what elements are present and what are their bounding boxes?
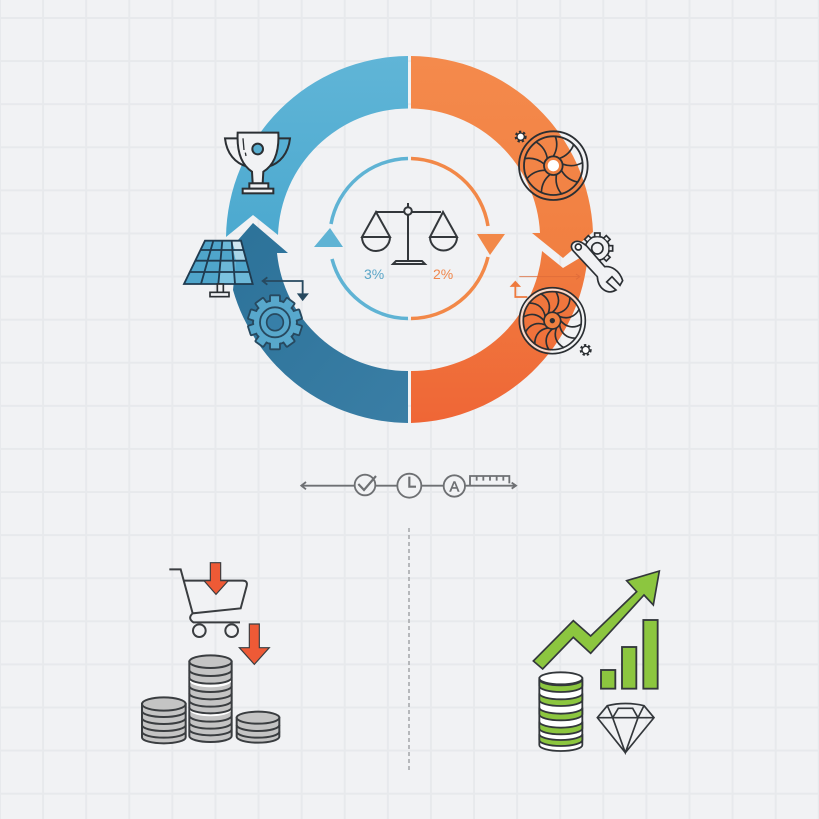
axis line	[301, 482, 516, 489]
segment: red orange	[411, 251, 588, 423]
arrow: blue elbow	[263, 277, 307, 300]
blue arc	[331, 158, 408, 318]
icon: gear behind wrench	[582, 233, 613, 264]
icon: small gear top	[516, 132, 526, 142]
icon: scales	[362, 203, 457, 264]
icon: green coin stack	[539, 672, 582, 751]
timeline	[301, 474, 516, 498]
icon: left coin stack	[142, 697, 186, 743]
right icons	[512, 131, 623, 355]
orange triangle	[477, 234, 505, 255]
icon: letter A circle: A	[449, 479, 459, 495]
icon: clock	[397, 474, 421, 498]
icon: tall coin stack	[189, 655, 232, 742]
panel: value up	[533, 571, 659, 753]
segment: orange	[411, 56, 593, 258]
arrow: orange elbow	[512, 282, 527, 297]
icon: turbine wheel top	[519, 131, 588, 200]
label: 2 percent: 2%	[433, 266, 453, 282]
central balance ring	[314, 158, 505, 318]
icon: green trend arrow	[533, 571, 659, 669]
icon: trophy	[225, 133, 290, 193]
orange arc	[411, 158, 488, 318]
left icons	[184, 133, 307, 349]
blue triangle	[314, 228, 343, 247]
icon: letter A circle	[444, 475, 465, 497]
icon: solar panel	[184, 241, 253, 297]
icon: small gear bottom	[581, 345, 591, 355]
icon: wrench	[571, 241, 623, 292]
arrow: orange line	[519, 274, 580, 279]
icon: ruler	[470, 476, 509, 485]
panel: cost down	[142, 563, 279, 743]
icon: gear	[248, 295, 302, 349]
center divider	[408, 528, 410, 771]
icon: red arrow on coins	[239, 624, 269, 664]
icon: bar chart	[601, 620, 658, 689]
icon: red arrow on cart	[204, 563, 228, 594]
icon: shopping cart	[169, 569, 247, 637]
label: 3 percent: 3%	[364, 266, 384, 282]
donut ring	[226, 56, 593, 423]
segment: light blue	[226, 56, 408, 237]
segment: dark blue	[233, 223, 408, 423]
icon: turbine wheel bottom	[519, 288, 585, 354]
icon: check circle	[355, 475, 376, 495]
icon: short coin stack	[237, 712, 279, 743]
icon: diamond	[597, 703, 654, 753]
